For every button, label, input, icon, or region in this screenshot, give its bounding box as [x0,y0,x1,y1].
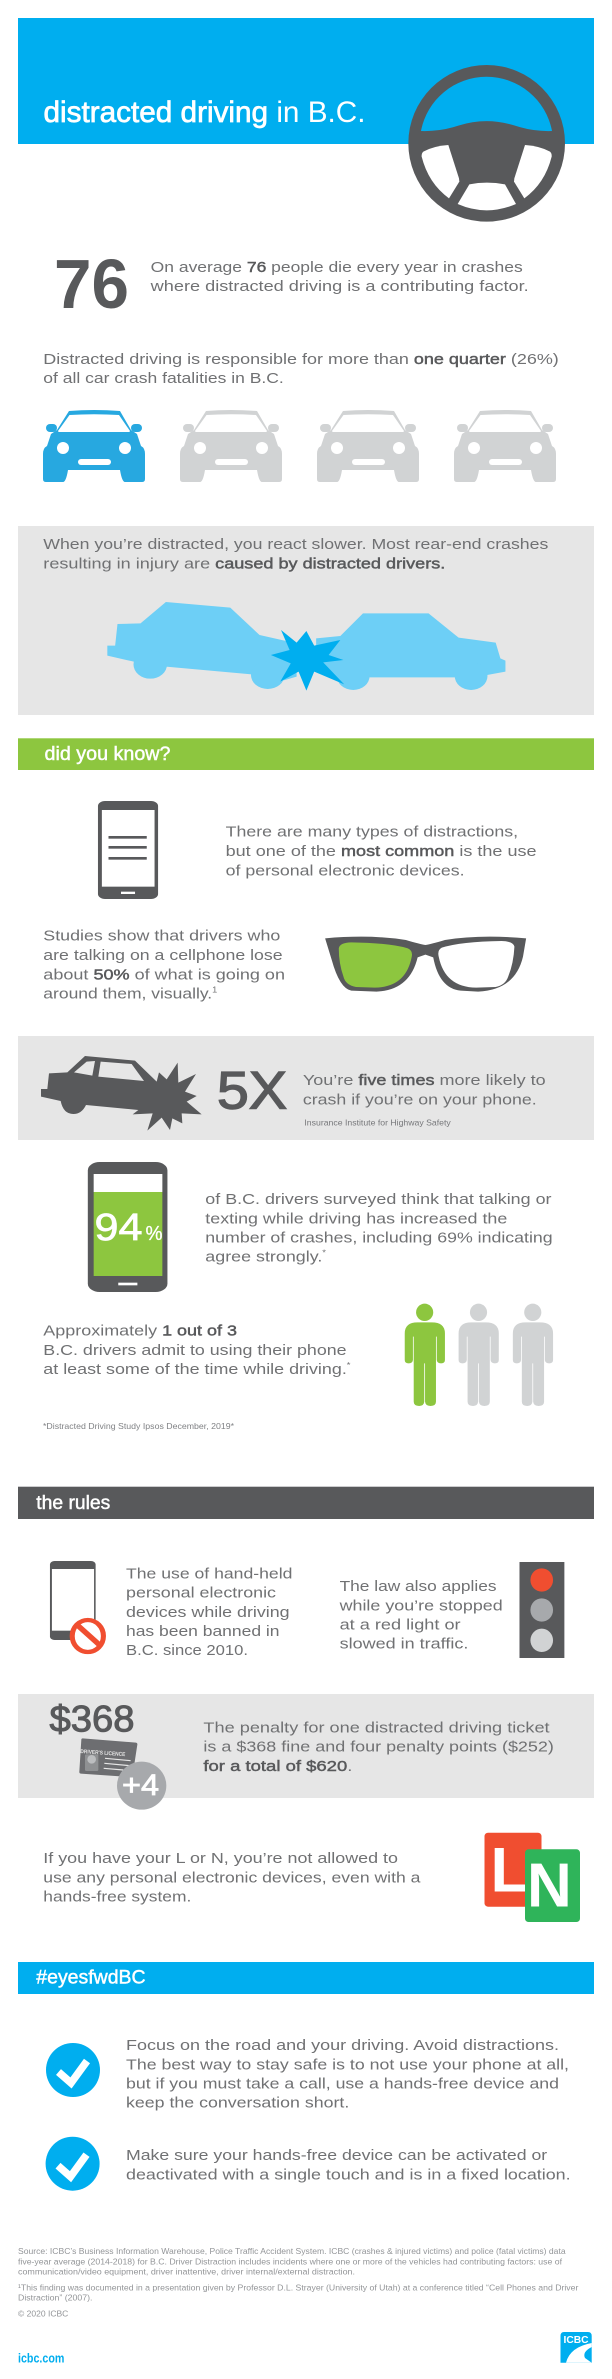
text: hand-held ban [126,1565,292,1659]
footer sources: © 2020 ICBC [18,2309,68,2319]
text: L or N drivers: use any personal electronic devices, even with a [43,1869,421,1886]
text: survey result [205,1191,553,1266]
section heading: #eyesfwdBC: #eyesfwdBC [36,1968,146,1988]
panel text: You’re five times more likely to [303,1072,546,1089]
text: lose 50% visually: Studies show that drivers who [43,928,280,945]
icon: phone prohibited [50,1561,103,1652]
icon: L and N signs: L [490,1836,529,1906]
impact star [271,630,344,691]
icon: traffic light [519,1562,564,1658]
panel text: resulting in injury are caused by distracted drivers. [43,556,445,573]
text: 1 out of 3: at least some of the time while driving. [43,1361,301,1378]
footer sources: communication/video equipment, driver inattentive, driver internal/external distraction. [18,2266,355,2276]
section heading: did you know? [18,738,594,770]
panel text: When you’re distracted, you react slower. Most rear-end crashes [43,536,549,553]
icon row: four cars, one highlighted [43,410,556,482]
text: survey result: * [322,1249,326,1258]
footer sources: Source: ICBC’s Business Information Warehouse, Police Traffic Accident System. ICBC (crashes & injured victims) and police (fatal victims) data [18,2246,566,2256]
icon: phone with 94% [88,1162,167,1292]
text: lose 50% visually: about 50% of what is going on [43,966,285,983]
icon: smartphone [98,801,158,899]
panel text: The penalty for one distracted driving ticket [203,1719,551,1736]
footer sources: ¹This finding was documented in a presentation given by Professor D.L. Strayer (University of Utah) at a conference titled “Cell Phones and Driver [18,2282,579,2292]
text: 1 out of 3: Approximately 1 out of 3 [43,1323,237,1340]
text: hands-free device [126,2147,571,2183]
fine amount: $368 [50,1698,134,1740]
text: lose 50% visually: around them, visually. [43,985,190,1002]
panel text: crash if you’re on your phone. [303,1091,537,1108]
icon: driver's licence and +4 points: +4 [122,1769,159,1802]
text: law applies when stopped: The law also applies [340,1578,497,1595]
illustration: two cars colliding [107,602,505,691]
text: focus on the road: keep the conversation short. [126,2095,349,2112]
stat text: where distracted driving is a contributing factor. [150,278,529,295]
title: distracted driving in B.C. [44,96,365,129]
icon: driver's licence and +4 points: DRIVER'S LICENCE [80,1749,126,1758]
panel text: is a $368 fine and four penalty points ($252) [203,1739,554,1756]
ICBC logo [560,2332,592,2363]
text: focus on the road [126,2037,569,2112]
text: most common distraction: but one of the most common is the use [226,843,537,860]
website link: icbc.com [18,2351,64,2366]
text: survey result: agree strongly. [205,1249,305,1266]
section heading: did you know?: did you know? [44,744,170,765]
panel text [43,536,549,573]
stat: 76 deaths [54,245,529,323]
icon: glasses with one green lens [325,937,526,992]
text: survey result: of B.C. drivers surveyed think that talking or [205,1191,552,1208]
big number 5X: 5X [217,1062,287,1120]
text: hand-held ban: has been banned in [126,1623,280,1640]
panel: five times more likely [18,1036,594,1140]
text: most common distraction: There are many types of distractions, [226,824,518,841]
text: hand-held ban: The use of hand-held [126,1565,292,1582]
panel: rear-end crashes [18,526,594,715]
icon: L and N signs [484,1833,580,1922]
text: 1 out of 3: B.C. drivers admit to using their phone [43,1342,347,1359]
text: focus on the road: Focus on the road and your driving. Avoid distractions. [126,2037,559,2054]
source note: Insurance Institute for Highway Safety [304,1118,452,1128]
text: most common distraction [226,824,537,879]
text: lose 50% visually: 1 [212,985,218,994]
text: hand-held ban: B.C. since 2010. [126,1642,248,1659]
text: law applies when stopped [338,1578,503,1652]
section heading: the rules [18,1487,594,1519]
94 percent figure: 94 [94,1207,142,1249]
panel text [203,1719,554,1775]
footer sources: Distraction” (2007). [18,2293,92,2303]
text: survey result: texting while driving has increased the [205,1210,507,1227]
icon: L and N signs: N [527,1852,572,1921]
header banner [18,18,594,144]
survey footnote: *Distracted Driving Study Ipsos December, 2019* [43,1421,235,1431]
big number 76: 76 [54,245,129,323]
icon row: three people, one highlighted [405,1304,553,1406]
text: one quarter of fatalities: of all car crash fatalities in B.C. [43,370,284,387]
text: 1 out of 3: * [347,1361,351,1370]
text: 1 out of 3 [43,1323,351,1378]
text: hand-held ban: devices while driving [126,1604,290,1621]
icon: phone with 94%: % [146,1223,163,1245]
icon: driver's licence and +4 points [79,1738,166,1810]
text: focus on the road: The best way to stay safe is to not use your phone at all, [126,2056,569,2073]
text: focus on the road: but if you must take a call, use a hands-free device and [126,2075,559,2092]
text: law applies when stopped: slowed in traffic. [340,1635,468,1652]
text: hands-free device: Make sure your hands-free device can be activated or [126,2147,547,2164]
icon: steering wheel [408,65,565,222]
icon: car crash [41,1056,202,1131]
stat text [150,259,529,295]
text: one quarter of fatalities [43,351,559,387]
text: L or N drivers: hands-free system. [43,1888,191,1905]
text: hand-held ban: personal electronic [126,1585,276,1602]
text: lose 50% visually [43,928,285,1002]
text: law applies when stopped: at a red light or [340,1616,461,1633]
stat text: On average 76 people die every year in crashes [151,259,523,276]
panel text: for a total of $620 . [203,1758,352,1775]
panel: penalty [18,1694,594,1810]
text: survey result: number of crashes, including 69% indicating [205,1229,553,1246]
section heading: the rules: the rules [36,1493,110,1514]
text: one quarter of fatalities: Distracted driving is responsible for more than one quarter (26%) [43,351,559,368]
ICBC logo: ICBC [564,2335,588,2346]
text: L or N drivers [43,1850,421,1905]
text: lose 50% visually: are talking on a cellphone lose [43,947,283,964]
footer sources [18,2246,579,2319]
panel text [303,1072,546,1108]
text: L or N drivers: If you have your L or N, you’re not allowed to [43,1850,398,1867]
text: most common distraction: of personal electronic devices. [226,862,465,879]
footer sources: five-year average (2014-2018) for B.C. Driver Distraction includes incidents where one or more of the vehicles had contributing factors: use of [18,2256,563,2266]
text: law applies when stopped: while you’re stopped [338,1597,503,1614]
section heading: #eyesfwdBC [18,1962,594,1994]
icon: check mark [46,2137,100,2191]
icon: check mark [46,2043,100,2097]
text: hands-free device: deactivated with a single touch and is in a fixed location. [126,2166,571,2183]
